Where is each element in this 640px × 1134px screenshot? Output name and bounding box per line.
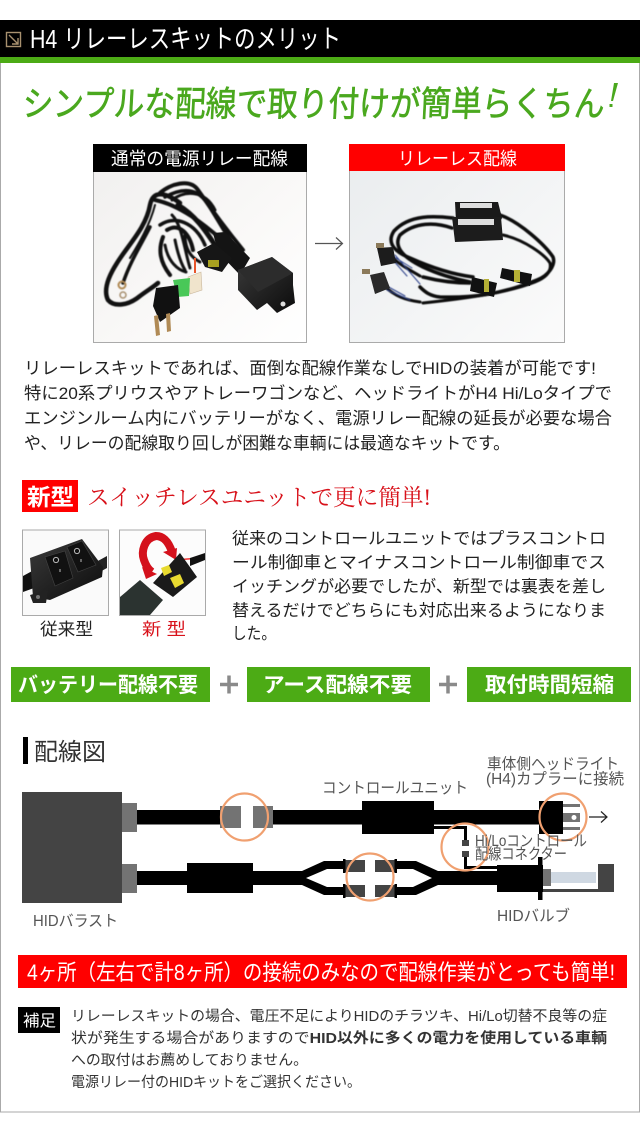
connection circles — [221, 794, 586, 900]
panel: standard relay wiring — [93, 144, 307, 342]
diagram labels: Hi/Loコントロール — [475, 833, 587, 850]
badge: supplement — [18, 1007, 60, 1033]
badge: supplement: 補足 — [23, 1012, 56, 1030]
intro paragraph: 特に20系プリウスやアトレーワゴンなど、ヘッドライトがH4 Hi/Loタイプで — [24, 383, 612, 403]
tag: no ground wiring: アース配線不要 — [263, 674, 412, 697]
intro paragraph: エンジンルーム内にバッテリーがなく、電源リレー配線の延長が必要な場合 — [24, 409, 612, 428]
label: conventional: 従来型 — [40, 620, 93, 639]
control unit — [362, 801, 434, 834]
photo: new connector — [120, 530, 206, 616]
subheading: new switchless unit: スイッチレスユニットで更に簡単! — [87, 485, 431, 510]
tag: no ground wiring — [247, 667, 430, 702]
upper cable — [137, 806, 540, 828]
wiring diagram heading: 配線図 — [34, 739, 106, 766]
header bar — [0, 20, 640, 63]
diagram labels — [33, 755, 624, 930]
badge: new model — [22, 480, 78, 512]
arrow to coupler — [589, 812, 607, 822]
caption: relayless wiring: リレーレス配線 — [398, 149, 517, 169]
supplement note — [18, 1007, 607, 1091]
tag: shorter install time: 取付時間短縮 — [485, 674, 614, 697]
diagram labels: コントロールユニット — [322, 780, 468, 797]
new type description: した。 — [232, 624, 276, 643]
new type description: 従来のコントロールユニットではプラスコントロ — [232, 529, 606, 548]
diagram labels: (H4)カプラーに接続 — [486, 770, 624, 788]
header title: H4 リレーレスキットのメリット — [30, 24, 341, 54]
HID ballast — [22, 792, 137, 903]
caption: standard relay wiring: 通常の電源リレー配線 — [111, 149, 288, 169]
note text: 電源リレー付のHIDキットをご選択ください。 — [71, 1074, 361, 1091]
diagram labels: 車体側ヘッドライト — [487, 755, 619, 773]
subheading: new switchless unit — [22, 480, 431, 512]
fork: right — [395, 861, 438, 895]
new type description: ール制御車とマイナスコントロール制御車でス — [232, 553, 606, 572]
plus icon — [220, 676, 238, 694]
diagram labels: HIDバラスト — [33, 913, 118, 930]
fork: left — [302, 861, 345, 895]
lower cable — [137, 859, 497, 898]
photo: relay harness — [106, 183, 243, 305]
note text: リレーレスキットの場合、電圧不足によりHIDのチラツキ、Hi/Lo切替不良等の症 — [71, 1007, 607, 1025]
panel: relayless wiring — [349, 144, 565, 342]
arrow between photos — [315, 238, 342, 250]
HID bulb — [497, 857, 614, 900]
H4 coupler — [539, 801, 580, 834]
caption: standard relay wiring — [93, 144, 307, 172]
photo: relayless harness — [384, 215, 554, 303]
intro paragraph: や、リレーの配線取り回しが困難な車輌には最適なキットです。 — [24, 434, 510, 453]
note text: への取付はお薦めしておりません。 — [71, 1052, 308, 1069]
icon: arrow box — [6, 32, 20, 46]
tag: no battery wiring: バッテリー配線不要 — [18, 674, 198, 697]
new type description — [232, 529, 606, 643]
note text — [71, 1007, 607, 1091]
wiring diagram — [22, 755, 624, 930]
tag: shorter install time — [467, 667, 631, 702]
photo: conventional switch unit — [22, 530, 108, 616]
note text: 状が発生する場合がありますので HID以外に多くの電力を使用している車輌 — [71, 1029, 607, 1047]
badge: new model: 新型 — [27, 484, 74, 510]
diagram labels: 配線コネクター — [475, 845, 567, 863]
benefit tags — [11, 667, 631, 702]
Hi/Lo control wire — [434, 828, 498, 868]
new type description: イッチングが必要でしたが、新型では裏表を差し — [232, 577, 606, 596]
caption: relayless wiring — [349, 144, 565, 171]
tag: no battery wiring — [11, 667, 210, 702]
intro paragraph: リレーレスキットであれば、面倒な配線作業なしでHIDの装着が可能です! — [24, 359, 596, 378]
diagram labels: HIDバルブ — [497, 906, 570, 925]
new type description: 替えるだけでどちらにも対応出来るようになりま — [232, 601, 606, 620]
intro paragraph — [24, 359, 612, 453]
plus icon — [439, 676, 457, 694]
label: new type: 新 型 — [142, 620, 186, 639]
